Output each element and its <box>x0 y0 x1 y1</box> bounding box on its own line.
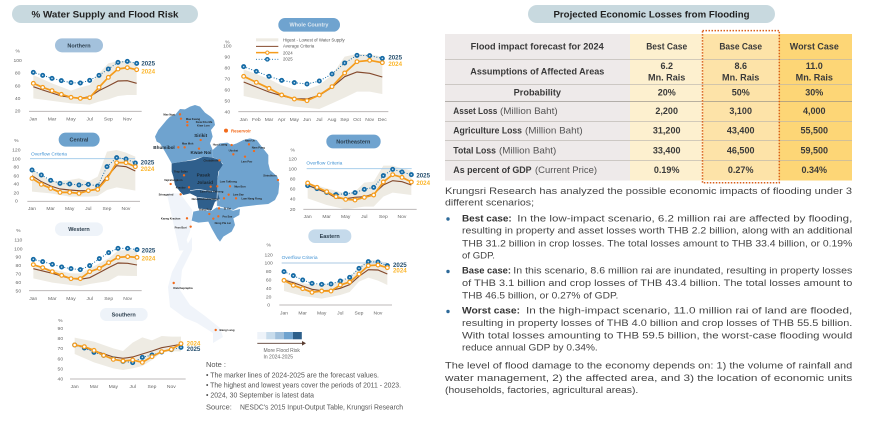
chart: Western: Sep <box>104 296 113 302</box>
bullet: best case: THB 31.2 billion in crop losses. The total losses amount to THB 33.4 billion, or 0.19% <box>462 238 853 249</box>
chart: Western: 2025 <box>142 248 156 255</box>
chart: Whole Country <box>223 18 403 123</box>
chart: Western: Mar <box>48 296 57 302</box>
reservoir names: Ubolrat <box>229 149 238 153</box>
chart: Eastern: Nov <box>374 310 383 316</box>
column: best case: 6.2 <box>660 61 673 71</box>
chart: Whole Country: Jul <box>316 117 323 123</box>
reservoir names: Bhumibol <box>153 145 175 150</box>
reservoir names: Lam Takhong <box>220 179 237 183</box>
chart: Southern: 80 <box>58 336 63 342</box>
bullet: best case: resulting in property and asset losses worth THB 2.2 billion, along with an additional <box>462 226 852 237</box>
notes: • The highest and lowest years cover the periods of 2011 - 2023. <box>206 380 401 390</box>
bullet: best case <box>446 213 853 262</box>
bullet: worst case: resulting in property losses of THB 4.0 billion and crop losses of THB 55.5 billion. <box>462 318 852 329</box>
chart: Northeastern: 120 <box>289 156 297 162</box>
table row labels <box>453 41 604 175</box>
reservoir names: Sirikit <box>194 133 208 138</box>
chart: Whole Country: Aug <box>328 117 337 123</box>
chart: Southern: 40 <box>58 377 63 383</box>
chart: Northern: 60 <box>15 83 21 89</box>
column: base case: Mn. Rais <box>722 72 759 82</box>
chart: Central: Jan <box>28 206 36 212</box>
chart: Southern: 60 <box>58 356 63 362</box>
pill: Northern <box>55 38 103 52</box>
pill: Whole Country: Whole Country <box>289 23 329 29</box>
heading: water supply and flood risk <box>12 5 198 23</box>
chart: Southern: 70 <box>58 346 63 352</box>
chart: Central: 40 <box>14 182 19 188</box>
chart: Central: 20 <box>14 190 19 196</box>
table row labels: Agriculture Loss <box>453 126 522 136</box>
chart: Whole Country: 90 <box>225 54 230 60</box>
bullet: worst case <box>446 306 852 354</box>
chart: Eastern <box>265 229 407 316</box>
chart: Southern: Mar <box>90 384 99 390</box>
chart: Central: Mar <box>46 206 55 212</box>
column: worst case: 59,500 <box>801 145 828 155</box>
column: base case: 46,500 <box>727 145 754 155</box>
reservoir names: Lam Phra Phloeng <box>200 190 224 194</box>
chart legend: 2024 <box>283 50 293 55</box>
chart: Northern: 2024 <box>141 68 156 75</box>
flood risk colour legend: More Flood Risk <box>264 348 300 354</box>
chart: Whole Country: Mar <box>265 117 274 123</box>
chart: Central: Jul <box>85 206 92 212</box>
chart: Northeastern: 2024 <box>416 180 431 187</box>
notes: • The marker lines of 2024-2025 are the forecast values. <box>206 370 379 380</box>
chart: Eastern: 60 <box>266 277 272 283</box>
chart legend: Average Criteria <box>283 44 315 49</box>
pill: Northeastern: Northeastern <box>336 139 371 145</box>
bullet: worst case: Worst case: <box>462 306 520 317</box>
chart: Southern: Jul <box>129 384 136 390</box>
pill: Central <box>59 133 100 147</box>
chart: Western: 110 <box>14 238 23 244</box>
conclusion text: The level of flood damage to the economy depends on: 1) the volume of rainfall and <box>445 360 852 371</box>
table row labels: (Million Baht) <box>500 106 558 116</box>
bullet: base case: THB 46.5 billion, or 0.27% of GDP. <box>462 291 618 302</box>
notes: Note : <box>206 360 226 369</box>
chart: Eastern: 120 <box>265 252 273 258</box>
chart: Central: % <box>14 138 19 144</box>
chart: Eastern: 40 <box>266 286 272 292</box>
column: worst case: 0.34% <box>802 165 827 175</box>
column: best case: Mn. Rais <box>648 72 685 82</box>
reservoir names: Srinagarind <box>159 192 174 196</box>
chart: Northeastern <box>289 135 431 220</box>
chart: Central <box>12 133 155 212</box>
pill: Northern: Northern <box>67 43 91 49</box>
reservoir markers <box>169 113 279 228</box>
chart: Western: Jul <box>86 296 93 302</box>
chart: Northeastern: Nov <box>398 214 407 220</box>
reservoir names: Mae Moh <box>182 141 194 145</box>
chart: Northern: 2025 <box>141 61 156 68</box>
chart: Eastern: % <box>266 243 271 249</box>
chart: Northeastern: 80 <box>290 176 296 182</box>
bullet: base case: of THB 3.1 billion and crop losses of THB 43.4 billion. The total losses amount to <box>462 278 852 289</box>
southern reservoirs: Ratchaprapha <box>173 286 193 290</box>
chart: Western <box>14 222 156 302</box>
chart: Southern: 50 <box>58 367 63 373</box>
bullet: best case: In the low-impact scenario, 6.2 million rai are affected by flooding, <box>517 213 852 224</box>
chart: Western: % <box>16 228 21 234</box>
table: flood impact forecast <box>445 34 852 180</box>
chart: Central: Overflow Criteria <box>31 151 67 157</box>
reservoir names: Pran Buri <box>175 225 187 229</box>
chart: Whole Country: 60 <box>225 87 230 93</box>
chart: Eastern: 20 <box>266 294 272 300</box>
chart: Central: Sep <box>103 206 112 212</box>
bullet: base case <box>446 266 853 302</box>
chart legend: 2025 <box>283 57 293 62</box>
conclusion text: (households, factories, agricultural areas). <box>445 385 638 396</box>
chart: Eastern: 2024 <box>393 268 407 275</box>
chart: Whole Country: 80 <box>225 65 230 71</box>
chart: Northeastern: Jan <box>304 214 312 220</box>
reservoir names: Kwae Noi <box>191 150 211 155</box>
chart: Southern: May <box>109 384 119 390</box>
chart: Northeastern: Mar <box>322 214 331 220</box>
reservoir names: Sirindhorn <box>263 173 277 177</box>
column: base case <box>719 41 762 175</box>
chart: Central: 2025 <box>141 160 155 167</box>
column: worst case: 11.0 <box>806 61 823 71</box>
chart: Northeastern: Overflow Criteria <box>306 161 343 167</box>
chart: Northern: Jul <box>86 116 93 122</box>
chart: Whole Country: May <box>290 117 300 123</box>
pill: Western: Western <box>68 227 90 233</box>
column: worst case: 4,000 <box>803 106 826 116</box>
column: worst case: 55,500 <box>801 126 828 136</box>
source: NESDC's 2015 Input-Output Table, Krungsri Research <box>240 402 403 412</box>
reservoir names: Huai Luang <box>213 142 228 146</box>
chart: Southern: 90 <box>58 326 63 332</box>
chart: Western: 90 <box>16 255 21 261</box>
reservoir names: Naruebodindrachinta <box>192 197 219 201</box>
chart: Western: Jan <box>29 296 38 302</box>
chart: Eastern: 100 <box>265 261 273 267</box>
reservoir names: Mae Ngat <box>163 113 175 117</box>
chart: Western: Nov <box>123 296 133 302</box>
chart: Eastern: 2025 <box>393 262 407 269</box>
bullet: best case: Best case: <box>462 213 512 224</box>
chart: Southern: 2024 <box>187 340 201 347</box>
pill: Southern: Southern <box>112 312 136 318</box>
reservoir names: Lam Nang Rong <box>241 196 262 200</box>
column: best case: 33,400 <box>653 145 680 155</box>
column: base case: 50% <box>732 88 750 98</box>
chart: Southern: 2025 <box>187 346 201 353</box>
bullet: worst case: With total losses amounting to THB 59.5 billion, the worst-case flooding would <box>462 330 852 341</box>
bullet: base case: Base case: <box>462 266 511 277</box>
chart: Whole Country: % <box>225 39 230 45</box>
reservoir names: Pra Sae <box>222 214 233 218</box>
chart: Northern: 40 <box>15 96 21 102</box>
chart: Southern: Sep <box>148 384 157 390</box>
table row labels: As percent of GDP <box>453 165 532 175</box>
chart: Whole Country: Apr <box>278 117 286 123</box>
reservoir names: Thap Salao <box>174 170 188 174</box>
column: best case: 0.19% <box>654 165 679 175</box>
reservoir names: Kraslao <box>176 185 186 189</box>
reservoir names: Si Yat <box>224 207 231 211</box>
conclusion text <box>444 360 853 396</box>
chart: Northeastern: 100 <box>289 166 297 172</box>
chart: Northeastern: % <box>290 148 295 154</box>
reservoir names <box>153 113 277 229</box>
map of Thailand flood risk <box>153 105 279 343</box>
intro text: different scenarios; <box>445 197 534 208</box>
column: best case: Best Case <box>646 41 687 51</box>
chart: Eastern: Mar <box>298 310 307 316</box>
chart: Eastern: Jul <box>337 310 344 316</box>
pill: Southern <box>100 308 148 321</box>
reservoir names: Kaeng Krachan <box>161 217 181 221</box>
chart: Central: May <box>65 206 75 212</box>
chart: Northeastern: Jul <box>361 214 368 220</box>
chart: Whole Country: Feb <box>252 117 261 123</box>
chart: Northeastern: 40 <box>290 197 296 203</box>
bullet: worst case: In the high-impact scenario, 11.0 million rai of land are flooded, <box>526 306 852 317</box>
bullet: worst case: reduce annual GDP by 0.34%. <box>462 343 598 354</box>
chart: Northeastern: May <box>341 214 351 220</box>
chart: Western: May <box>66 296 76 302</box>
chart: Northern: May <box>66 116 76 122</box>
chart: Western: 50 <box>16 288 21 294</box>
column: worst case: Worst Case <box>790 41 839 51</box>
pill: Eastern: Eastern <box>320 234 340 240</box>
table row labels: Asset Loss <box>453 106 497 116</box>
chart: Southern: % <box>58 318 63 324</box>
bullet: best case: of GDP. <box>462 251 495 262</box>
reservoir names: Nong Pla Lai <box>215 221 231 225</box>
column: worst case <box>790 41 839 175</box>
chart: Central: 60 <box>14 173 19 179</box>
column: base case: 8.6 <box>734 61 747 71</box>
chart: Eastern: Sep <box>355 310 364 316</box>
chart: Central: 120 <box>12 148 21 154</box>
chart: Whole Country: 40 <box>225 109 230 115</box>
table row labels: (Current Price) <box>535 165 597 175</box>
chart: Eastern: Overflow Criteria <box>282 255 318 261</box>
pill: Central: Central <box>70 138 89 144</box>
heading: water supply and flood risk: % Water Supply and Flood Risk <box>32 9 179 20</box>
reservoir legend: Reservoir <box>231 128 251 133</box>
pill: Eastern <box>308 229 351 243</box>
heading: projected economic losses <box>528 5 775 23</box>
pill: Western <box>55 222 103 236</box>
southern reservoirs <box>172 282 235 332</box>
chart: Whole Country: Jan <box>240 117 248 123</box>
reservoir names: Lam Sae <box>233 193 244 197</box>
reservoir names: Lam Pao <box>241 160 253 164</box>
chart: Northeastern: 20 <box>290 207 296 213</box>
chart: Northern: Mar <box>48 116 57 122</box>
chart: Central: 100 <box>12 156 21 162</box>
chart: Northern: Sep <box>104 116 113 122</box>
reservoir names: Pasak <box>197 173 210 178</box>
table row labels: Flood impact forecast for 2024 <box>471 41 604 51</box>
chart: Eastern: May <box>317 310 327 316</box>
chart: Central: 0 <box>15 199 18 205</box>
notes <box>206 360 401 400</box>
chart: Whole Country: Sep <box>340 117 349 123</box>
chart legend: Higest - Lowest of Water Supply <box>283 37 345 42</box>
chart legend <box>256 37 345 62</box>
chart: Whole Country: Oct <box>353 117 361 123</box>
intro text <box>445 186 852 208</box>
heading: projected economic losses: Projected Economic Losses from Flooding <box>554 9 750 20</box>
chart: Eastern: 0 <box>267 303 270 309</box>
reservoir names: Nam Pung <box>252 145 265 149</box>
column: best case: 2,200 <box>655 106 678 116</box>
chart: Northern: 20 <box>15 109 21 115</box>
chart: Northern: 80 <box>15 71 21 77</box>
chart: Whole Country: Nov <box>365 117 375 123</box>
chart: Southern: Nov <box>167 384 176 390</box>
chart: Southern: Jan <box>71 384 79 390</box>
column: base case: Base Case <box>719 41 762 51</box>
chart: Central: 80 <box>14 165 19 171</box>
column: worst case: 30% <box>805 88 823 98</box>
reservoir names: Bang Pra <box>199 208 211 212</box>
chart: Western: 2024 <box>142 255 156 262</box>
intro text: Krungsri Research has analyzed the possible economic impacts of flooding under 3 <box>445 186 852 197</box>
pill: Whole Country <box>278 18 340 32</box>
chart: Northern: Nov <box>123 116 132 122</box>
table row labels: (Million Baht) <box>525 126 583 136</box>
conclusion text: water management, 2) the affected area, and 3) the location of economic units <box>444 373 853 384</box>
reservoir names: Nam Un <box>245 139 255 143</box>
dotted highlight: base case <box>702 31 779 183</box>
reservoir names: Mae Kuang <box>186 117 200 121</box>
chart: Eastern: Jan <box>280 310 288 316</box>
table row labels: Assumptions of Affected Areas <box>470 67 604 77</box>
flood risk colour legend: In 2024-2025 <box>264 355 293 361</box>
chart: Western: 80 <box>16 263 21 269</box>
chart: Eastern: 80 <box>266 269 272 275</box>
reservoir names: Kiew Lom <box>197 123 210 127</box>
chart: Western: 70 <box>16 272 21 278</box>
column: base case: 0.27% <box>728 165 753 175</box>
chart: Northern: 100 <box>14 58 22 64</box>
chart: Northeastern: 60 <box>290 187 296 193</box>
chart: Whole Country: 2024 <box>388 61 403 68</box>
table row labels: Total Loss <box>453 145 496 155</box>
chart: Whole Country: Dec <box>378 117 387 123</box>
chart: Northern: % <box>15 48 20 54</box>
chart: Central: 2024 <box>141 166 155 173</box>
chart: Northeastern: Sep <box>379 214 388 220</box>
southern reservoirs: Bang Lang <box>220 328 235 332</box>
table row labels: (Million Baht) <box>499 145 556 155</box>
chart: Northern: Jan <box>29 116 38 122</box>
reservoir names: Kiew Kho Ma <box>196 120 213 124</box>
chart: Western: 60 <box>16 280 21 286</box>
column: worst case: Mn. Rais <box>796 72 833 82</box>
chart: Central: Nov <box>122 206 131 212</box>
table row labels: Probability <box>514 88 561 98</box>
column: best case: 20% <box>658 88 676 98</box>
column: base case: 3,100 <box>729 106 752 116</box>
column: best case: 31,200 <box>653 126 680 136</box>
chart: Southern <box>58 308 201 390</box>
flood risk colour legend <box>257 332 306 361</box>
column: best case <box>646 41 687 175</box>
chart: Northern <box>14 38 156 122</box>
reservoir names: Jolasid <box>197 180 213 185</box>
source: Source: <box>206 402 232 412</box>
reservoir names: Mun Bon <box>234 184 246 188</box>
reservoir names: Vajiralongkorn <box>164 178 183 182</box>
bullet: base case: In this scenario, 8.6 million rai are inundated, resulting in property losses <box>513 266 853 277</box>
chart: Whole Country: 70 <box>225 76 230 82</box>
chart: Western: 100 <box>14 246 23 252</box>
chart: Whole Country: 50 <box>225 98 230 104</box>
column: base case: 43,400 <box>727 126 754 136</box>
chart: Whole Country: 100 <box>223 43 232 49</box>
chart: Northeastern: 2025 <box>416 173 431 180</box>
pill: Northeastern <box>326 135 381 148</box>
reservoir names: Chulabhorn <box>204 158 219 162</box>
chart: Whole Country: Jun <box>303 117 311 123</box>
notes: • 2024, 30 September is latest data <box>206 390 315 400</box>
chart: Whole Country: 2025 <box>388 54 403 61</box>
